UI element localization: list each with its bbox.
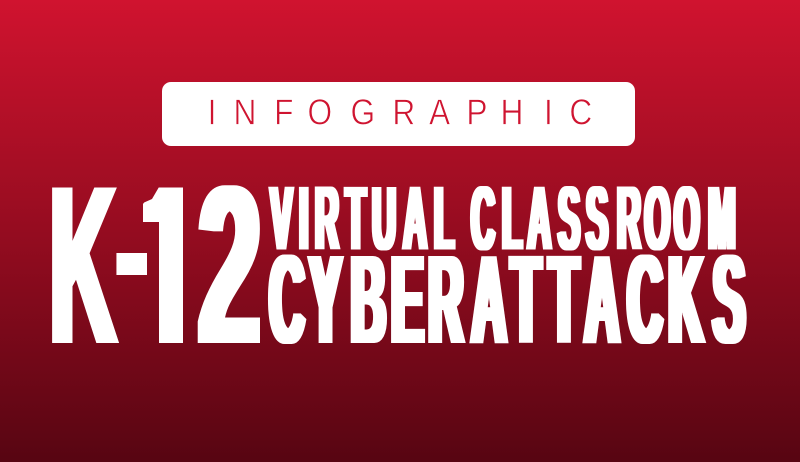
- title: K-12: [52, 185, 260, 343]
- badge: infographic label: INFOGRAPHIC: [208, 92, 592, 133]
- title: K-12: 2: [198, 138, 261, 391]
- title: virtual classroom: VIRTUAL CLASSROOM: [271, 168, 735, 269]
- badge: infographic label: [162, 82, 635, 146]
- title: K-12: K-: [49, 119, 147, 391]
- title: K-12: 1: [135, 138, 198, 391]
- title: cyberattacks: CYBERATTACKS: [269, 229, 745, 371]
